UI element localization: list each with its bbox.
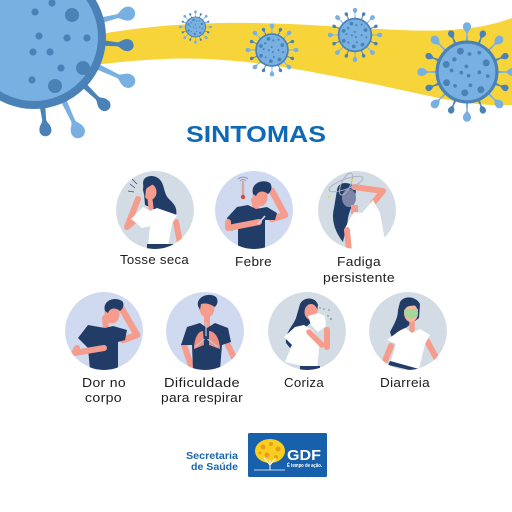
symptom: febre [215, 171, 293, 269]
symptom: diarreia [369, 292, 447, 390]
title: SINTOMAS [186, 121, 326, 147]
illustration: woman coughing [116, 171, 194, 252]
logo: secretaria de saude [186, 450, 238, 473]
label: diarreia: Diarreia [380, 375, 430, 390]
illustration: woman with nausea [369, 292, 447, 372]
illustration: woman dizzy [318, 171, 396, 252]
illustration: man with lungs [166, 292, 244, 370]
label: febre: Febre [235, 254, 272, 269]
tagline: É tempo de ação. [287, 461, 323, 469]
small virus 1 [179, 10, 212, 44]
label: dor no corpo: corpo [85, 390, 122, 405]
yellow ribbon [95, 18, 512, 105]
symptom: fadiga persistente [318, 171, 396, 285]
symptom: coriza [268, 292, 346, 390]
symptom: dor no corpo [65, 292, 143, 405]
label: coriza: Coriza [284, 375, 324, 390]
label: dor no corpo: Dor no [82, 375, 126, 390]
label: dor no corpo [82, 375, 126, 405]
logo: GDF [248, 433, 327, 477]
illustration: man with thermometer [215, 171, 293, 250]
logo: secretaria de saude: Secretaria [186, 450, 238, 462]
logo: secretaria de saude: de Saúde [191, 461, 238, 473]
large virus, top left [0, 0, 138, 141]
GDF wordmark: GDF [287, 447, 321, 464]
large virus, right [417, 22, 512, 122]
small virus 2 [245, 23, 299, 77]
symptom: tosse seca [116, 171, 194, 267]
label: tosse seca: Tosse seca [120, 252, 189, 267]
illustration: man with body ache [65, 292, 143, 370]
label: fadiga persistente: persistente [323, 270, 395, 285]
label: fadiga persistente [323, 254, 395, 285]
label: dificuldade para respirar: para respirar [161, 390, 243, 405]
label: dificuldade para respirar: Dificuldade [164, 375, 240, 390]
illustration: woman sneezing [268, 292, 346, 370]
icon: yellow tree [254, 439, 285, 470]
label: dificuldade para respirar [161, 375, 243, 405]
label: fadiga persistente: Fadiga [337, 254, 381, 269]
symptom: dificuldade para respirar [161, 292, 244, 405]
small virus 3 [328, 8, 382, 62]
